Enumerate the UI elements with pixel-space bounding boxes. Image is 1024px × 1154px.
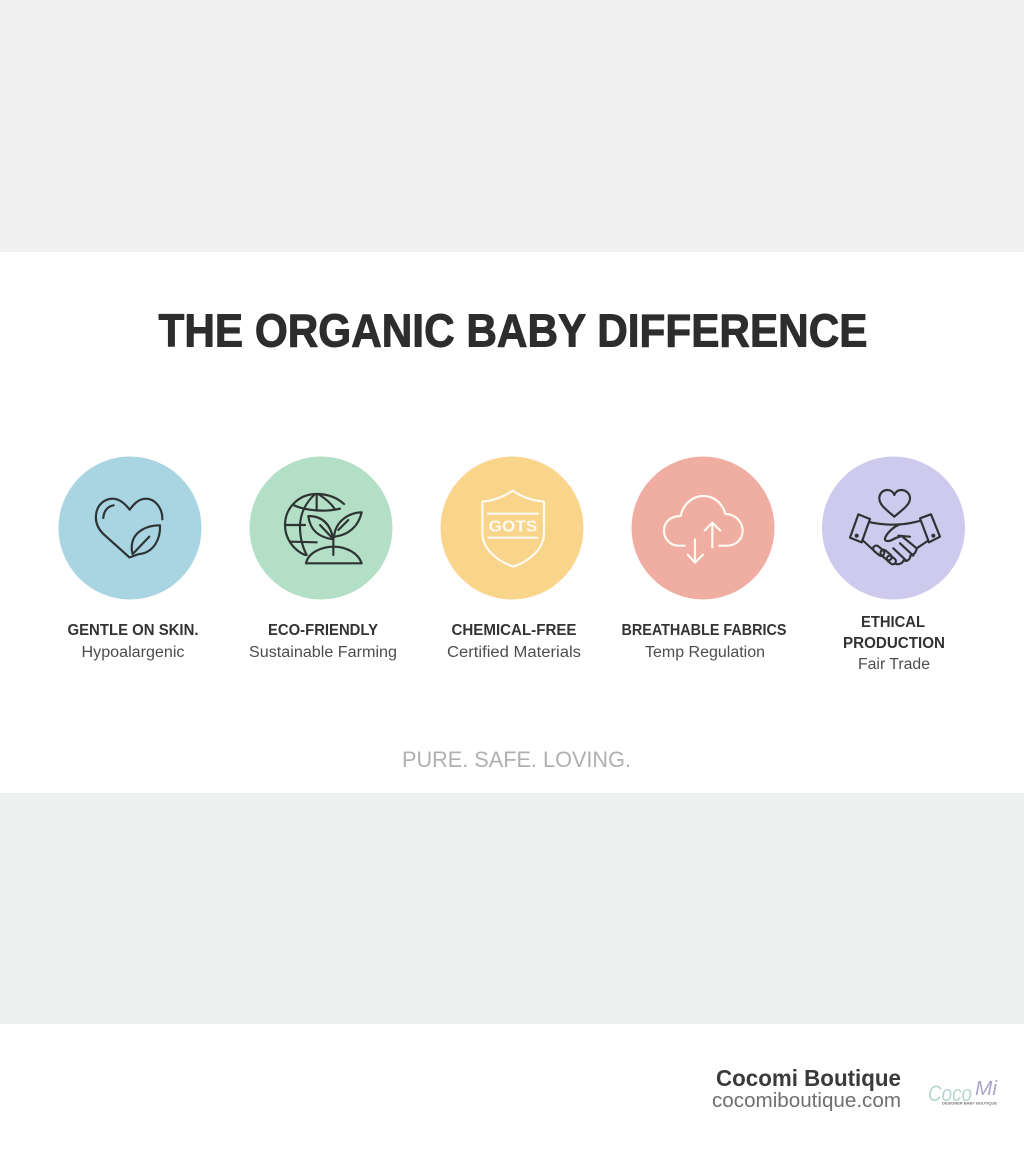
icon: GOTS shield: GOTS (489, 518, 537, 535)
label: ETHICAL (861, 614, 925, 631)
circle: lavender (822, 456, 965, 600)
circle: blue (58, 456, 202, 600)
circle: yellow (440, 456, 584, 600)
panel: eco-friendly (249, 456, 397, 661)
label line two: PRODUCTION (843, 635, 945, 652)
panel: gentle on skin (58, 456, 202, 661)
lower grey band (0, 793, 1024, 1024)
panel: ethical production (822, 456, 965, 673)
sublabel: Temp Regulation (645, 644, 765, 661)
top grey band (0, 0, 1024, 252)
logo script end: Mi (975, 1078, 998, 1100)
label: BREATHABLE FABRICS (622, 622, 786, 639)
title: THE ORGANIC BABY DIFFERENCE (158, 304, 868, 356)
label: ECO-FRIENDLY (268, 622, 379, 639)
logo script: Coco (928, 1081, 972, 1106)
label: CHEMICAL-FREE (452, 622, 576, 639)
icon: heart with leaf (96, 499, 162, 557)
circle: coral (632, 456, 774, 600)
icon: globe with sprout (285, 494, 362, 563)
sublabel: Fair Trade (858, 656, 930, 673)
circle: green (250, 456, 392, 600)
icon: cloud with arrows (664, 496, 743, 563)
brand name: Cocomi Boutique (716, 1065, 901, 1091)
label: GENTLE ON SKIN. (68, 622, 198, 639)
icon: GOTS shield (482, 491, 544, 567)
logo tagline: DESIGNER BABY BOUTIQUE (942, 1102, 998, 1106)
tagline: PURE. SAFE. LOVING. (402, 747, 631, 772)
logo (928, 1078, 998, 1106)
sublabel: Sustainable Farming (249, 644, 397, 661)
sublabel: Certified Materials (447, 644, 581, 661)
icon: handshake with heart (850, 490, 940, 566)
panel: chemical-free (440, 456, 584, 661)
panel: breathable fabrics (622, 456, 786, 661)
brand url: cocomiboutique.com (712, 1090, 901, 1112)
sublabel: Hypoalargenic (82, 644, 185, 661)
